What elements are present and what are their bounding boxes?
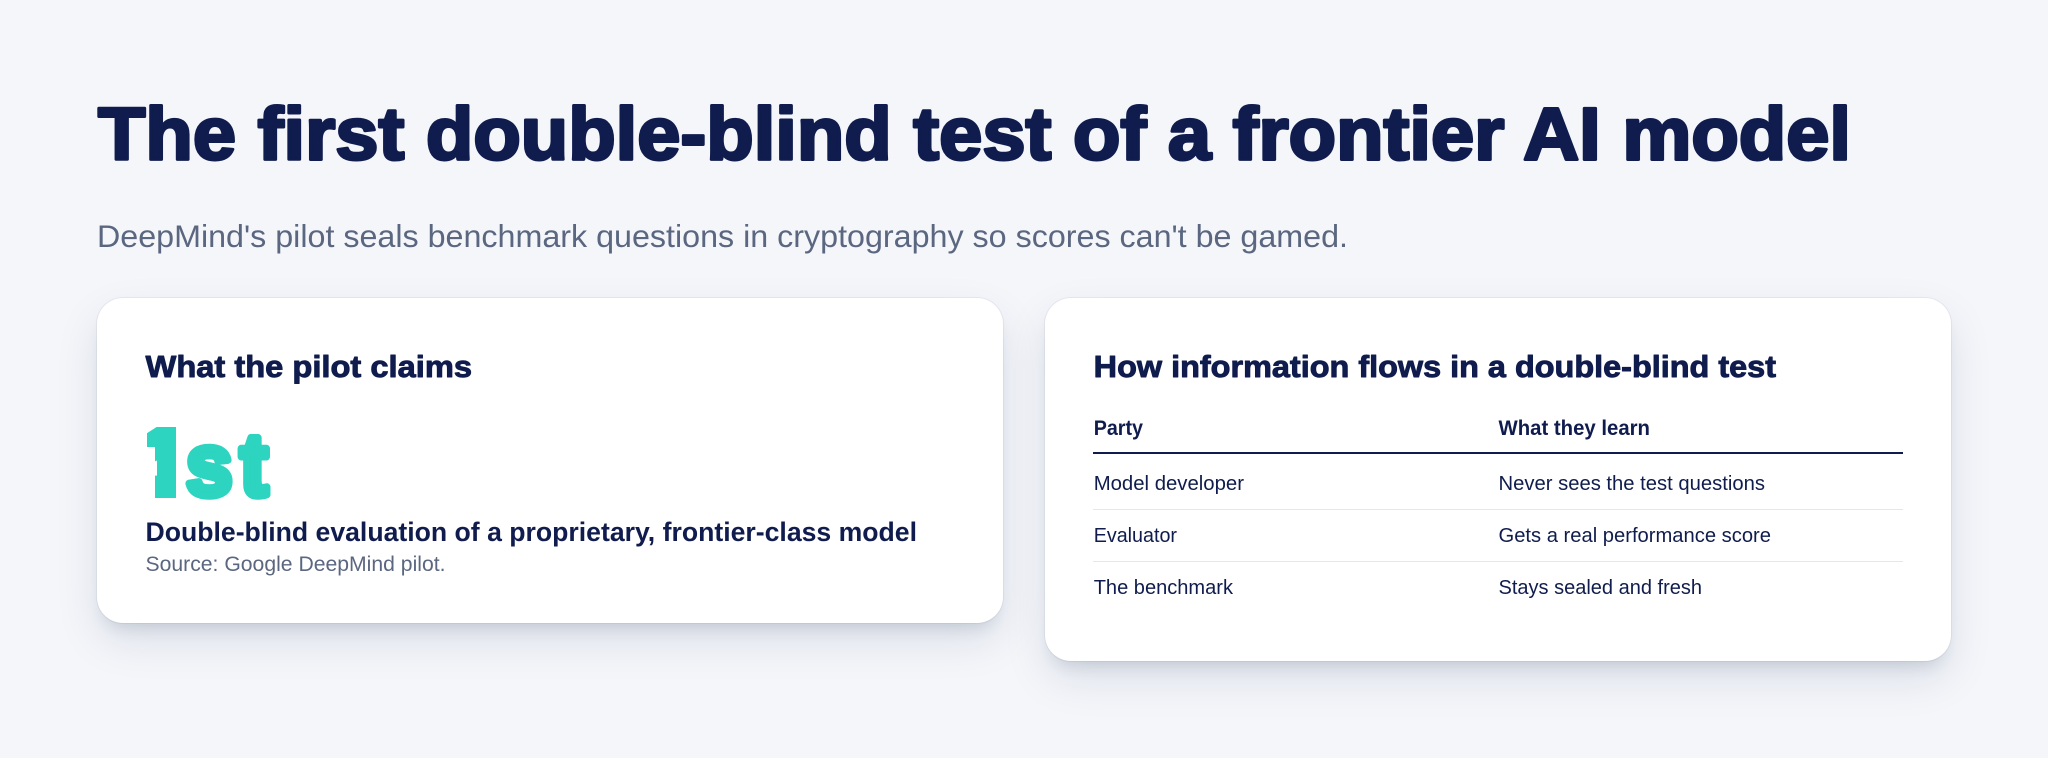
row: model developer xyxy=(1093,472,1903,510)
row: evaluator xyxy=(1093,524,1903,562)
big stat: 1st: 1 xyxy=(146,413,197,515)
subtitle: DeepMind's pilot seals benchmark questions in cryptography so scores can't be gamed. xyxy=(97,218,1348,254)
source note: Source: Google DeepMind pilot. xyxy=(146,553,446,576)
row: the benchmark xyxy=(1094,576,1702,599)
panel: what the pilot claims xyxy=(97,298,1003,623)
row: the benchmark: Stays sealed and fresh xyxy=(1498,576,1702,599)
panel heading: How information flows in a double-blind test xyxy=(1094,350,1776,384)
panel heading: What the pilot claims xyxy=(146,350,472,384)
row: evaluator: Evaluator xyxy=(1094,524,1177,547)
table header: What they learn xyxy=(1498,417,1650,440)
row: model developer: Model developer xyxy=(1094,472,1244,495)
title: The first double-blind test of a frontier AI model xyxy=(98,93,1851,176)
big stat: 1st xyxy=(147,427,270,500)
table header: Party xyxy=(1094,417,1143,440)
panel: how information flows xyxy=(1045,298,1951,661)
table header xyxy=(1093,417,1903,454)
row: evaluator: Gets a real performance score xyxy=(1498,524,1771,547)
row: the benchmark: The benchmark xyxy=(1094,576,1234,599)
table xyxy=(1093,417,1903,599)
row: model developer: Never sees the test questions xyxy=(1498,472,1765,495)
big stat: 1st: st xyxy=(186,416,268,514)
stat description: Double-blind evaluation of a proprietary, frontier-class model xyxy=(146,517,917,547)
